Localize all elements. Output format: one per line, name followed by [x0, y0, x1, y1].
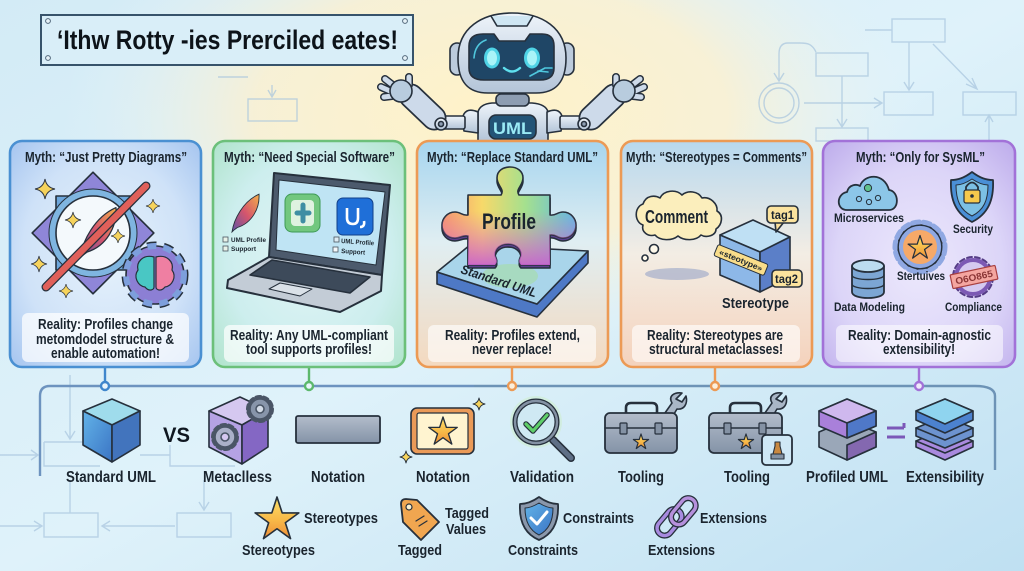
icon: crossed out ornate frame: [32, 172, 154, 294]
item: tooling toolbox: [605, 393, 687, 486]
item: notation bar: Notation: [311, 469, 365, 486]
icon: security shield: [951, 172, 993, 222]
label: Security: [953, 222, 993, 236]
item: notation star frame: [400, 398, 485, 486]
connector drops and nodes: [101, 367, 923, 390]
reality callout: Reality: Stereotypes are: [647, 327, 783, 344]
icon: sparkles: [31, 179, 160, 298]
label: Stertuives: [897, 269, 945, 283]
legend: stereotypes: [242, 497, 378, 559]
legend: stereotypes: Stereotypes: [242, 542, 315, 559]
item: extensibility layers: [906, 399, 984, 486]
item: standard UML cube: [66, 399, 156, 486]
reality callout: metomdodel structure &: [36, 331, 174, 348]
robot left arm: [381, 77, 478, 133]
legend: tagged values: [398, 499, 489, 559]
legend: constraints: Constraints: [508, 542, 578, 559]
legend: extensions: Extensions: [700, 510, 767, 527]
item: metaclass cube with gears: Metaclless: [203, 469, 272, 486]
icon: comment thought cloud: [636, 191, 721, 280]
panel: replace standard UML: [417, 141, 608, 367]
reality callout: [632, 325, 800, 362]
legend: extensions: Extensions: [648, 542, 715, 559]
panel: need special software: [213, 141, 405, 367]
icon: stereotype cube: [714, 206, 802, 292]
versus label: VS: [163, 424, 190, 447]
reality callout: Reality: Any UML-compliant: [230, 327, 388, 344]
item: validation magnifier: [510, 396, 574, 486]
icon: green app tile: [285, 194, 320, 232]
item: tooling toolbox with stamp: [709, 393, 792, 486]
legend: tagged values: Tagged: [398, 542, 442, 559]
legend: stereotypes: Stereotypes: [304, 510, 378, 527]
robot head: [450, 13, 574, 93]
heading: Myth: “Stereotypes = Comments”: [626, 149, 807, 166]
legend: constraints: Constraints: [563, 510, 634, 527]
item: tooling toolbox: Tooling: [618, 469, 664, 486]
screen checklist: Support: [341, 248, 366, 257]
legend: extensions: [648, 495, 767, 559]
reality callout: [836, 325, 1003, 362]
heading: Myth: “Just Pretty Diagrams”: [25, 149, 187, 166]
icon: compliance stamp: [950, 257, 998, 297]
icon: profile puzzle piece: [442, 167, 576, 268]
legend: tagged values: Values: [446, 521, 486, 538]
robot right arm: [547, 77, 644, 133]
screen checklist: UML Profile: [341, 238, 375, 247]
label: Microservices: [834, 211, 904, 225]
panel: just pretty diagrams: [10, 141, 201, 367]
heading: Myth: “Only for SysML”: [856, 149, 985, 166]
icon: feather with checklist: Support: [231, 246, 257, 253]
base label: Standard UML: [459, 262, 539, 300]
icon: standard UML base slab: [437, 245, 588, 317]
icon: microservices cloud: [839, 177, 897, 210]
robot mascot: [381, 13, 644, 141]
cube label: Stereotype: [722, 295, 789, 312]
legend: constraints: [508, 497, 634, 559]
reality callout: never replace!: [472, 341, 552, 358]
reality callout: [224, 325, 394, 362]
robot torso: [478, 94, 548, 141]
icon: stereotype cube: tag1: [771, 208, 794, 222]
item: tooling toolbox with stamp: Tooling: [724, 469, 770, 486]
screen checklist: [333, 237, 375, 257]
faint flow diagram top right: [759, 19, 1016, 141]
icon: star badge: [895, 222, 945, 272]
item: extensibility layers: Extensibility: [906, 469, 984, 486]
reality callout: [428, 325, 596, 362]
faint flow diagram top left: [218, 77, 297, 121]
icon: laptop: [227, 173, 390, 312]
reality callout: tool supports profiles!: [246, 341, 372, 358]
icon: blue app tile: [337, 198, 373, 235]
item: standard UML cube: Standard UML: [66, 469, 156, 486]
heading: Myth: “Need Special Software”: [224, 149, 395, 166]
icon: stereotype cube: «steotype»: [718, 248, 764, 273]
item: profiled UML stack: [806, 399, 888, 486]
icon: stereotype cube: tag2: [775, 272, 798, 286]
reality callout: extensibility!: [883, 341, 955, 358]
cloud label: Comment: [645, 207, 708, 227]
reality callout: Reality: Domain-agnostic: [848, 327, 991, 344]
legend: tagged values: Tagged: [445, 505, 489, 522]
item: notation star frame: Notation: [416, 469, 470, 486]
title text: ‘Ithw Rotty -ies Prerciled eates!: [57, 25, 398, 55]
reality callout: Reality: Profiles extend,: [445, 327, 580, 344]
icon: feather with checklist: UML Profile: [231, 237, 266, 244]
puzzle label: Profile: [482, 209, 536, 234]
reality callout: [22, 313, 189, 362]
reality callout: Reality: Profiles change: [38, 316, 173, 333]
icon: gear with brain: [126, 246, 184, 304]
icon: database: [852, 260, 884, 298]
title plaque: [41, 15, 413, 65]
panel: stereotypes equals comments: [621, 141, 812, 367]
faint flow diagram bottom left: [0, 375, 235, 537]
icon: feather with checklist: [223, 194, 266, 253]
label: Compliance: [945, 300, 1002, 314]
item: metaclass cube with gears: [203, 397, 272, 486]
label: Data Modeling: [834, 300, 905, 314]
reality callout: structural metaclasses!: [649, 341, 783, 358]
item: notation bar: [296, 416, 380, 486]
item: validation magnifier: Validation: [510, 469, 574, 486]
equivalence symbol: [887, 423, 905, 437]
reality callout: enable automation!: [51, 345, 160, 362]
connector rail: [40, 367, 995, 476]
heading: Myth: “Replace Standard UML”: [427, 149, 598, 166]
robot UML badge text: UML: [493, 119, 532, 138]
item: profiled UML stack: Profiled UML: [806, 469, 888, 486]
icon: compliance stamp: O6O865: [954, 268, 995, 287]
panel: only for SysML: [823, 141, 1015, 367]
